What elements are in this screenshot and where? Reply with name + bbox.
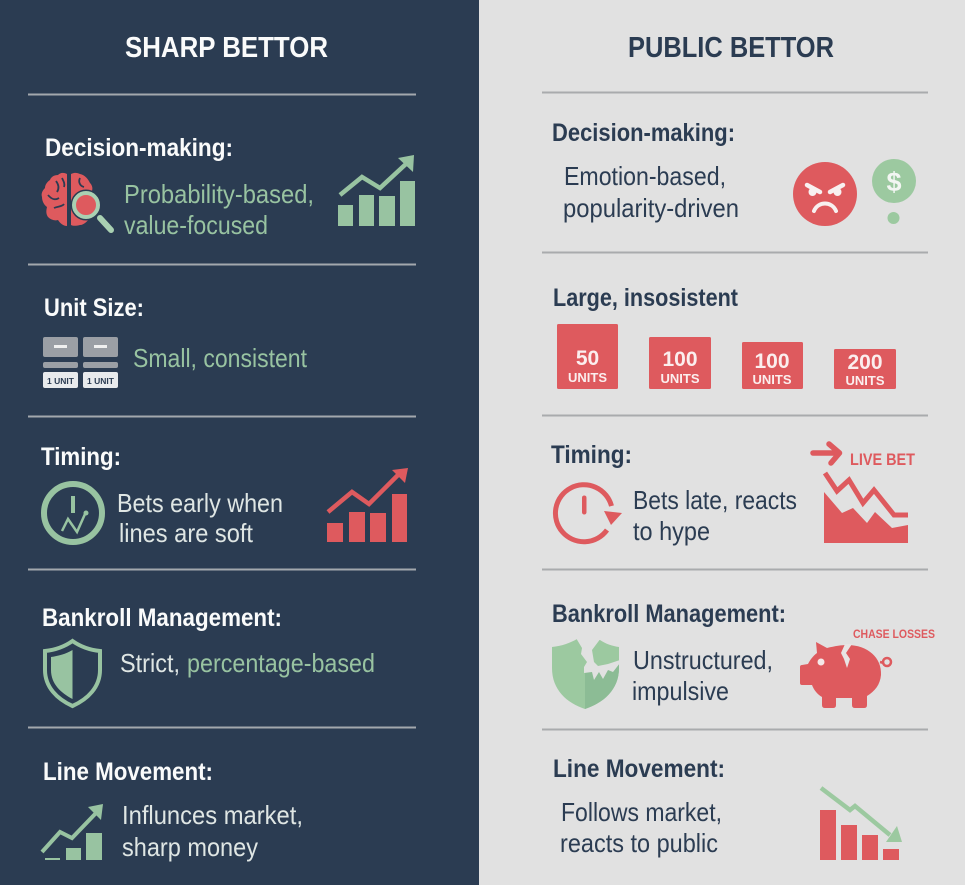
label: decision-making: Decision-making:: [45, 134, 233, 162]
icon: half-filled shield: [45, 641, 100, 706]
box: 200 units: 200: [847, 351, 883, 374]
text: to hype: to hype: [633, 516, 710, 546]
icon: cracked shield: [552, 638, 620, 709]
box: 100 units: 100: [662, 348, 698, 371]
row: public unit size: [553, 284, 896, 389]
panel: sharp bettor: [0, 0, 479, 885]
row: public timing: [551, 441, 916, 546]
icon: live bet arrow: [813, 444, 916, 469]
icon: two unit blocks: 1 UNIT: [87, 376, 115, 386]
icon: falling bars with green arrow: [820, 788, 902, 860]
box: 50 units: UNITS: [568, 370, 607, 385]
icon: dollar coin with dot: $: [886, 167, 902, 197]
icon: angry face: [793, 162, 857, 226]
box: 50 units: [557, 324, 618, 389]
label: line movement: Line Movement:: [43, 758, 213, 786]
box: 100 units: UNITS: [660, 371, 700, 386]
label: large, insosistent: Large, insosistent: [553, 284, 739, 312]
text: impulsive: impulsive: [632, 676, 729, 706]
text: influnces market: Influnces market,: [122, 800, 303, 830]
text: strict, percentage-based: Strict,: [120, 648, 180, 678]
icon: red clock with arrow: [555, 485, 622, 542]
heading: public bettor: PUBLIC BETTOR: [628, 32, 834, 64]
label: decision-making: Decision-making:: [552, 119, 735, 147]
text: follows market: Follows market,: [561, 797, 722, 827]
text: emotion-based: Emotion-based,: [564, 161, 726, 191]
icon: rising green bar chart: [338, 155, 415, 226]
row: public bankroll management: [552, 600, 935, 709]
row: public line movement: [553, 755, 902, 860]
label: timing: Timing:: [41, 443, 121, 471]
box: 100 units second: 100: [754, 350, 790, 373]
row: sharp unit size: [43, 294, 308, 388]
box: 200 units: [834, 349, 896, 389]
box: 200 units: UNITS: [846, 373, 885, 388]
text: sharp money: sharp money: [122, 832, 258, 862]
text: bets early when: Bets early when: [117, 488, 283, 518]
row: sharp bankroll management: [42, 604, 375, 706]
icon: dollar coin with dot: [872, 159, 916, 224]
box: 100 units second: UNITS: [752, 372, 792, 387]
icon: rising red bar chart: [327, 468, 408, 542]
label: bankroll management: Bankroll Management:: [552, 600, 786, 628]
row: sharp timing: [41, 443, 408, 548]
icon: two unit blocks: 1 UNIT: [47, 376, 75, 386]
box: 50 units: 50: [576, 347, 599, 370]
text: strict, percentage-based: [120, 648, 375, 678]
heading: sharp bettor: SHARP BETTOR: [125, 32, 328, 64]
text: lines are soft: lines are soft: [119, 518, 254, 548]
text: value-focused: value-focused: [124, 210, 268, 240]
icon: two unit blocks: [43, 337, 118, 388]
box: 100 units second: [742, 342, 803, 389]
icon: rising line with bars: [42, 804, 103, 860]
text: small, consistent: Small, consistent: [133, 343, 308, 373]
box: 100 units: [649, 337, 711, 389]
panel: public bettor: [542, 32, 935, 860]
icon: cracked piggy bank: [800, 629, 935, 708]
icon: live bet arrow: LIVE BET: [850, 450, 916, 469]
icon: green clock with trend: [44, 484, 102, 542]
text: bets late, reacts: Bets late, reacts: [633, 485, 797, 515]
text: popularity-driven: popularity-driven: [563, 193, 739, 223]
icon: brain with magnifier: [42, 173, 111, 230]
label: timing: Timing:: [551, 441, 632, 469]
text: unstructured: Unstructured,: [633, 645, 773, 675]
row: sharp decision-making: [42, 134, 415, 240]
text: strict, percentage-based: percentage-based: [187, 648, 375, 678]
label: line movement: Line Movement:: [553, 755, 725, 783]
text: reacts to public: reacts to public: [560, 828, 718, 858]
row: public decision-making: [552, 119, 916, 226]
label: unit size: Unit Size:: [44, 294, 144, 322]
label: bankroll management: Bankroll Management:: [42, 604, 282, 632]
icon: falling area chart: [824, 473, 908, 543]
row: sharp line movement: [42, 758, 303, 862]
icon: cracked piggy bank: CHASE LOSSES: [853, 629, 935, 641]
text: probability-based: Probability-based,: [124, 179, 314, 209]
